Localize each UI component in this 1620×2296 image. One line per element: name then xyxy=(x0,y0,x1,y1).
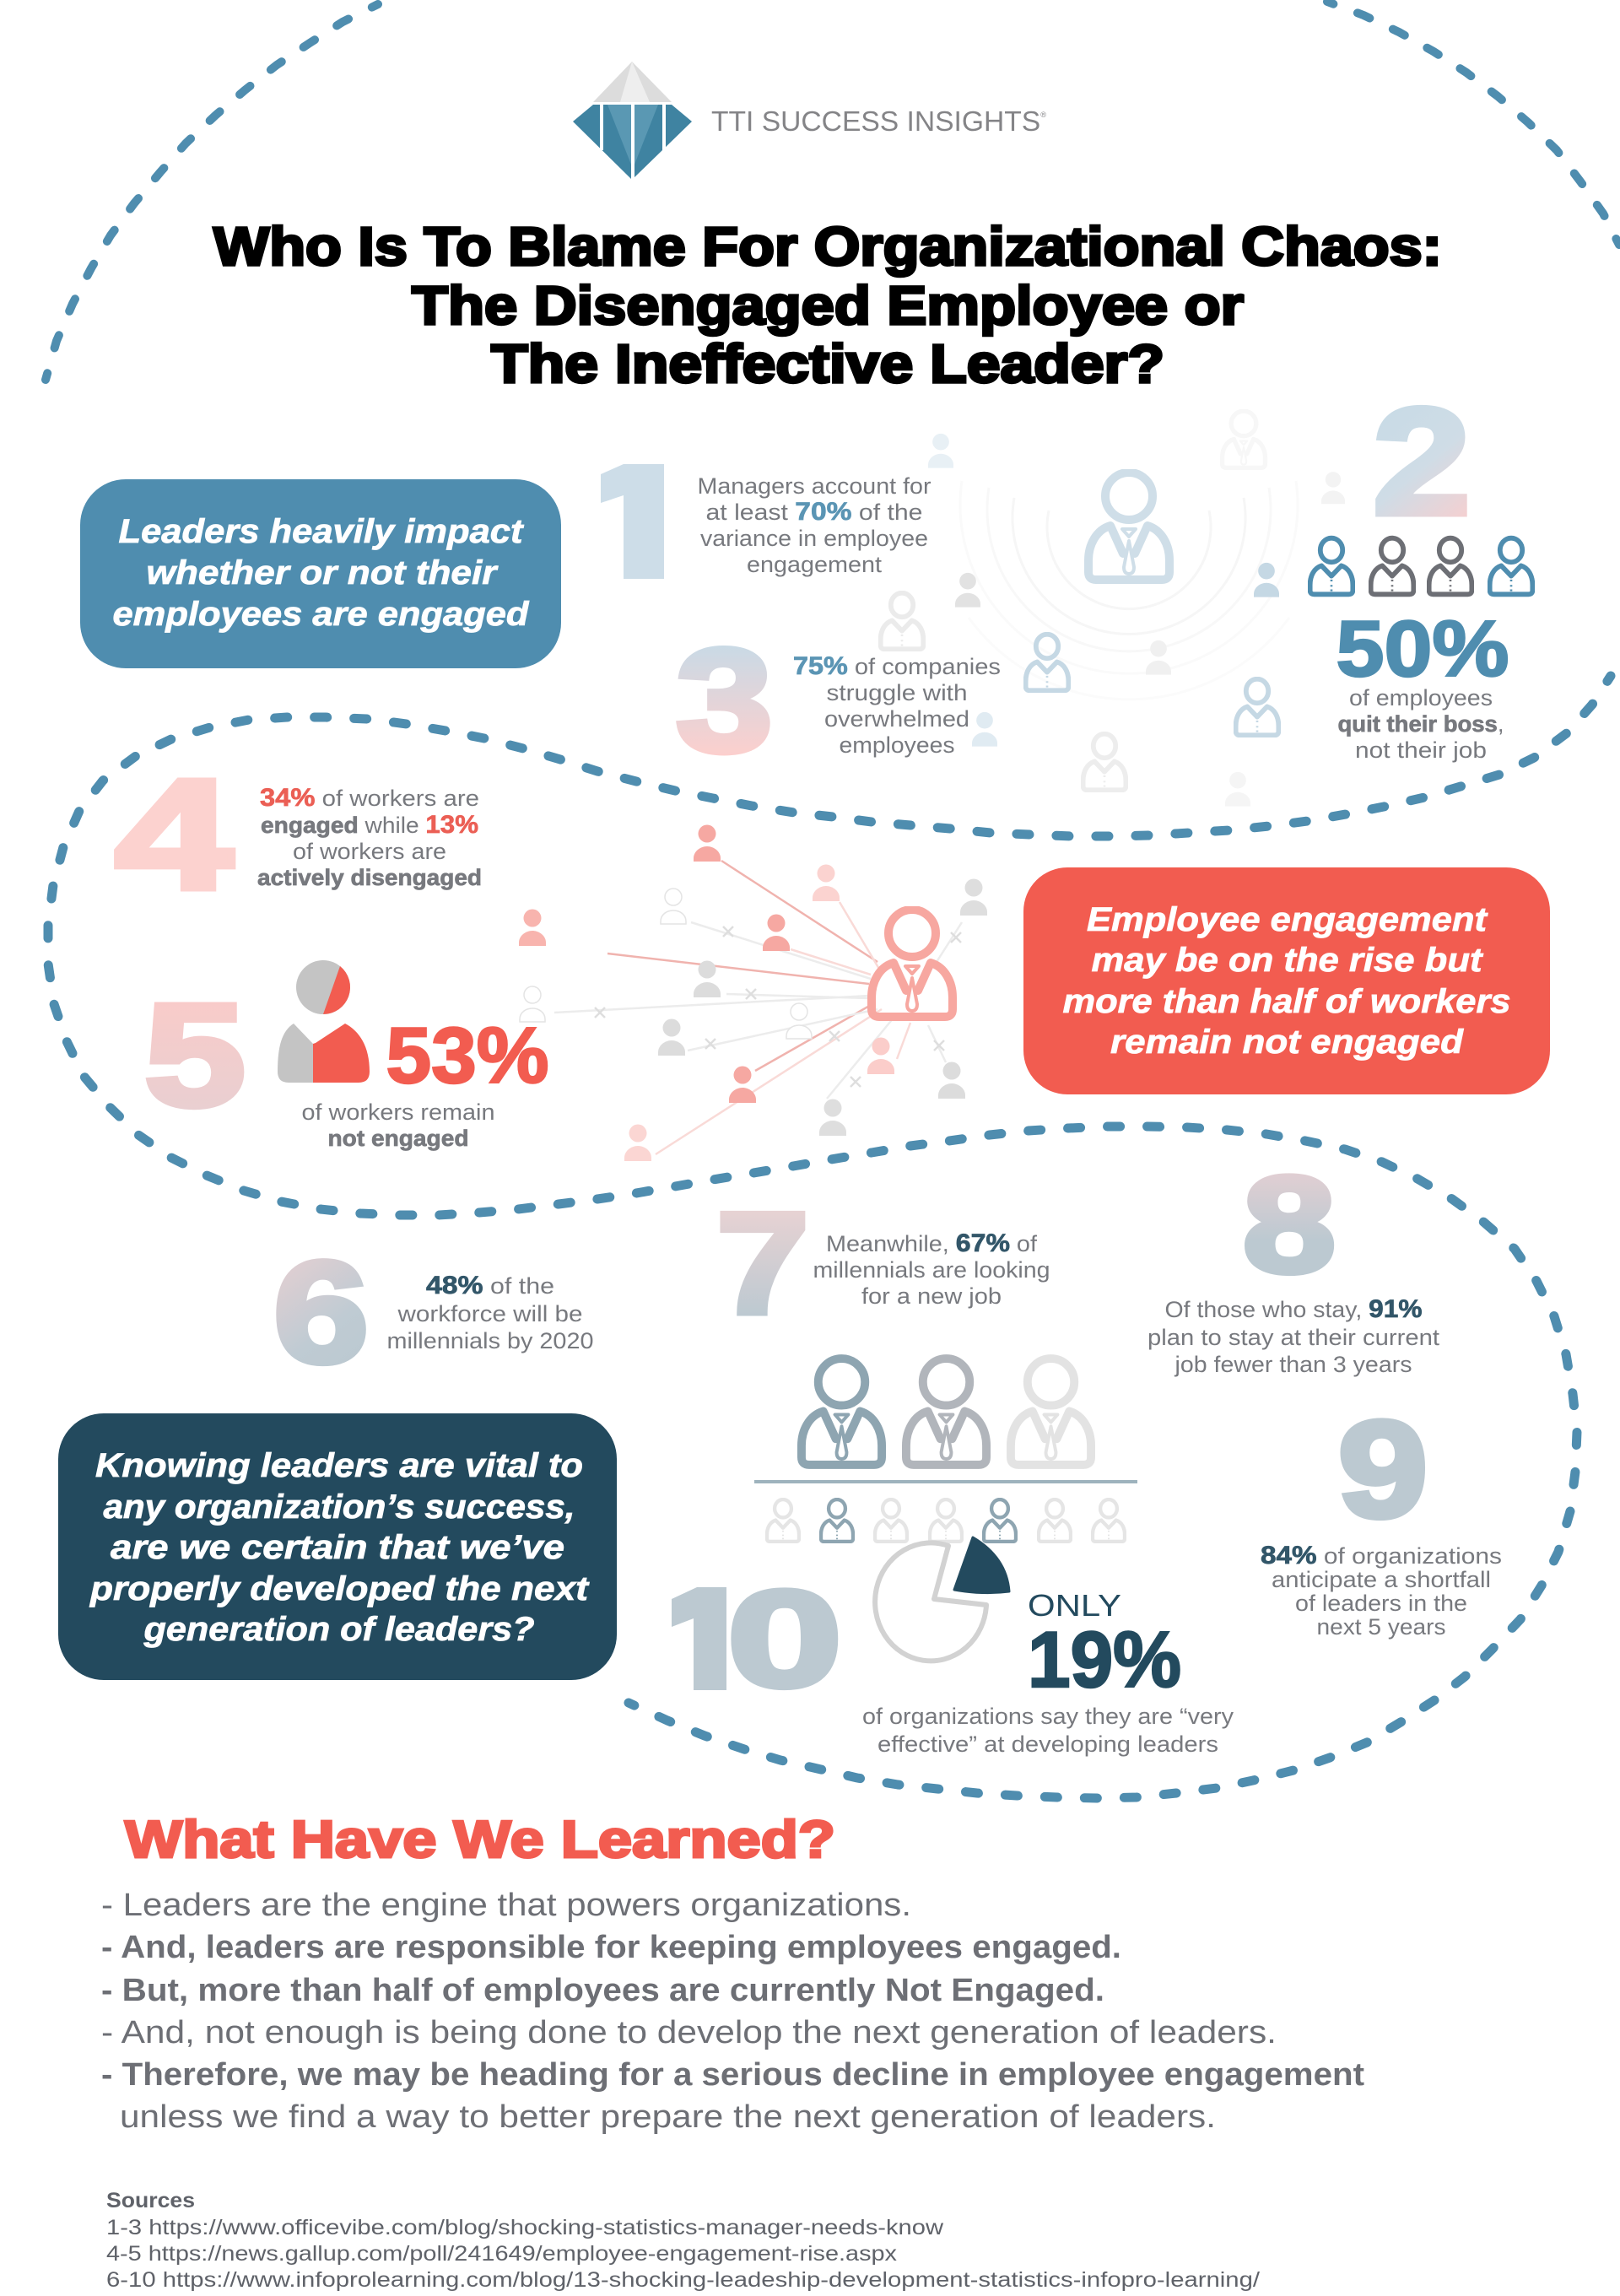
icon group: three leaders xyxy=(802,1359,1091,1465)
icon: pink central manager xyxy=(872,910,953,1017)
text: stat 4: actively disengaged xyxy=(257,865,482,890)
text: stat 4: engaged while 13% xyxy=(261,811,478,839)
text: stat 6: workforce will be xyxy=(397,1301,582,1326)
panel: section 3 leadership callout: are we certain that we’ve xyxy=(111,1529,564,1566)
text: stat 2: not their job xyxy=(1355,737,1487,763)
concentric rings behind manager xyxy=(960,481,1298,700)
panel: section 3 leadership callout: properly developed the next xyxy=(89,1570,590,1607)
text: stat 10: of organizations say they are “very xyxy=(862,1704,1234,1729)
text block: learnings: - Leaders are the engine that powers organizations. xyxy=(101,1888,911,1923)
dashed path: winding middle section xyxy=(48,676,1611,1798)
panel: section 2 engagement callout: remain not engaged xyxy=(1110,1024,1465,1061)
panel: section 3 leadership callout: Knowing leaders are vital to xyxy=(95,1447,583,1484)
panel: section 3 leadership callout: any organization’s success, xyxy=(103,1488,575,1526)
logo wordmark: TTI SUCCESS INSIGHTS xyxy=(711,105,1034,137)
logo wordmark: ® xyxy=(1040,111,1046,119)
number 10: 0 xyxy=(727,1563,842,1715)
panel: section 3 leadership callout xyxy=(58,1413,617,1680)
text block: learnings: - Therefore, we may be heading for a serious decline in employee engagement xyxy=(101,2057,1364,2093)
text block: learnings: - But, more than half of employees are currently Not Engaged. xyxy=(101,1973,1104,2008)
number 4: 4 xyxy=(115,748,233,922)
logo icon: diamond xyxy=(573,62,692,180)
number 9: 9 xyxy=(1338,1393,1428,1546)
icon: central manager xyxy=(1088,473,1169,580)
text: stat 4: of workers are xyxy=(293,839,446,864)
panel: section 3 leadership callout: generation of leaders? xyxy=(143,1611,534,1648)
text: stat 7: millennials are looking xyxy=(813,1257,1050,1283)
text: stat 9: of leaders in the xyxy=(1295,1591,1467,1616)
dashed path: top left arc xyxy=(46,4,378,380)
text: stat 2 xyxy=(1338,685,1504,763)
number 2: 2 xyxy=(1373,377,1471,547)
text: stat 9: 84% of organizations xyxy=(1261,1542,1502,1569)
panel: section 1 leaders callout xyxy=(80,479,561,668)
icon group: seven employees xyxy=(767,1499,1125,1542)
text: stat 5: of workers remain xyxy=(302,1099,494,1125)
text: stat 7: for a new job xyxy=(861,1283,1002,1309)
text: stat 3: employees xyxy=(839,732,955,758)
text: stat 7 xyxy=(813,1229,1050,1309)
text: stat 3: 75% of companies xyxy=(793,652,1001,680)
text: stat 4: 34% of workers are xyxy=(260,784,479,812)
text: stat 1: engagement xyxy=(747,552,883,577)
text block: learnings: - And, leaders are responsible for keeping employees engaged. xyxy=(101,1930,1121,1965)
people network: connection lines xyxy=(554,861,962,1154)
number 10 xyxy=(672,1587,839,1691)
chart: 19% pie xyxy=(875,1537,1009,1661)
text: stat 6 xyxy=(386,1272,594,1353)
title: Who Is To Blame For Organizational Chaos: xyxy=(213,216,1442,277)
faint people around manager xyxy=(881,411,1345,807)
text block: sources: 4-5 https://news.gallup.com/poll/241649/employee-engagement-rise.aspx xyxy=(106,2242,898,2266)
text block: learnings: unless we find a way to better prepare the next generation of leaders. xyxy=(120,2099,1216,2135)
text: stat 2: of employees xyxy=(1349,685,1493,710)
text: stat 10 xyxy=(862,1704,1234,1757)
text: stat 8 xyxy=(1148,1295,1440,1377)
label: ONLY: ONLY xyxy=(1028,1588,1121,1623)
panel: section 2 engagement callout: Employee engagement xyxy=(1087,901,1488,938)
people network: people xyxy=(519,825,987,1161)
text block: learnings: - And, not enough is being done to develop the next generation of leaders. xyxy=(101,2015,1277,2050)
text: stat 8: job fewer than 3 years xyxy=(1174,1352,1412,1377)
logo xyxy=(573,62,1046,180)
text: stat 1 xyxy=(697,473,932,577)
divider line xyxy=(754,1480,1137,1483)
text: stat 5 xyxy=(302,1099,494,1151)
stat: 50%: 50% xyxy=(1336,604,1509,693)
text block: sources xyxy=(106,2189,1260,2292)
stat: 19%: 19% xyxy=(1028,1615,1181,1704)
icon row: four employees xyxy=(1310,538,1532,594)
text: stat 10: effective” at developing leaders xyxy=(878,1731,1218,1757)
panel: section 2 engagement callout: more than half of workers xyxy=(1063,983,1510,1020)
title: The Ineffective Leader? xyxy=(491,333,1164,394)
panel: section 2 engagement callout: may be on the rise but xyxy=(1092,942,1483,979)
panel: section 2 engagement callout xyxy=(1023,867,1550,1094)
title: The Disengaged Employee or xyxy=(412,275,1244,336)
panel: section 1 leaders callout: employees are engaged xyxy=(113,596,530,633)
text: stat 1: at least 70% of the xyxy=(705,498,923,526)
panel: section 1 leaders callout: Leaders heavily impact xyxy=(118,513,524,550)
panel: section 1 leaders callout: whether or not their xyxy=(147,554,499,592)
text: stat 5: not engaged xyxy=(327,1126,469,1151)
text: stat 8: Of those who stay, 91% xyxy=(1164,1295,1423,1323)
text: stat 3 xyxy=(793,652,1001,758)
text: stat 8: plan to stay at their current xyxy=(1148,1325,1440,1350)
dashed path: top right arc xyxy=(1327,2,1619,245)
number 3: 3 xyxy=(676,618,773,782)
title xyxy=(213,216,1442,394)
text block: sources: 6-10 https://www.infoprolearning.com/blog/13-shocking-leadeship-development-statistics-infopro-learning/ xyxy=(106,2268,1260,2292)
text: stat 1: Managers account for xyxy=(697,473,932,499)
text: stat 3: overwhelmed xyxy=(824,706,969,732)
number 8: 8 xyxy=(1243,1148,1336,1301)
number 6: 6 xyxy=(273,1232,369,1393)
text: stat 9: next 5 years xyxy=(1316,1614,1446,1640)
text: stat 6: 48% of the xyxy=(426,1272,554,1299)
text block: learnings xyxy=(101,1888,1364,2135)
text: stat 2: quit their boss, xyxy=(1338,711,1504,737)
text: stat 9: anticipate a shortfall xyxy=(1272,1567,1491,1592)
number 1: 1 xyxy=(595,432,679,617)
number 10: 1 xyxy=(667,1559,742,1721)
icon: half-filled person xyxy=(278,960,370,1083)
number 7: 7 xyxy=(716,1183,809,1344)
stat: 53%: 53% xyxy=(386,1011,548,1099)
text: stat 9 xyxy=(1261,1542,1502,1640)
text: stat 1: variance in employee xyxy=(700,526,928,551)
text block: sources: 1-3 https://www.officevibe.com/blog/shocking-statistics-manager-needs-know xyxy=(106,2216,944,2239)
text: stat 4 xyxy=(257,784,482,890)
heading: what have we learned: What Have We Learned? xyxy=(125,1811,835,1869)
text: stat 6: millennials by 2020 xyxy=(386,1328,594,1353)
number 5: 5 xyxy=(144,973,246,1137)
text: stat 3: struggle with xyxy=(827,680,967,705)
text: stat 7: Meanwhile, 67% of xyxy=(826,1229,1038,1257)
text block: sources: Sources xyxy=(106,2189,195,2212)
